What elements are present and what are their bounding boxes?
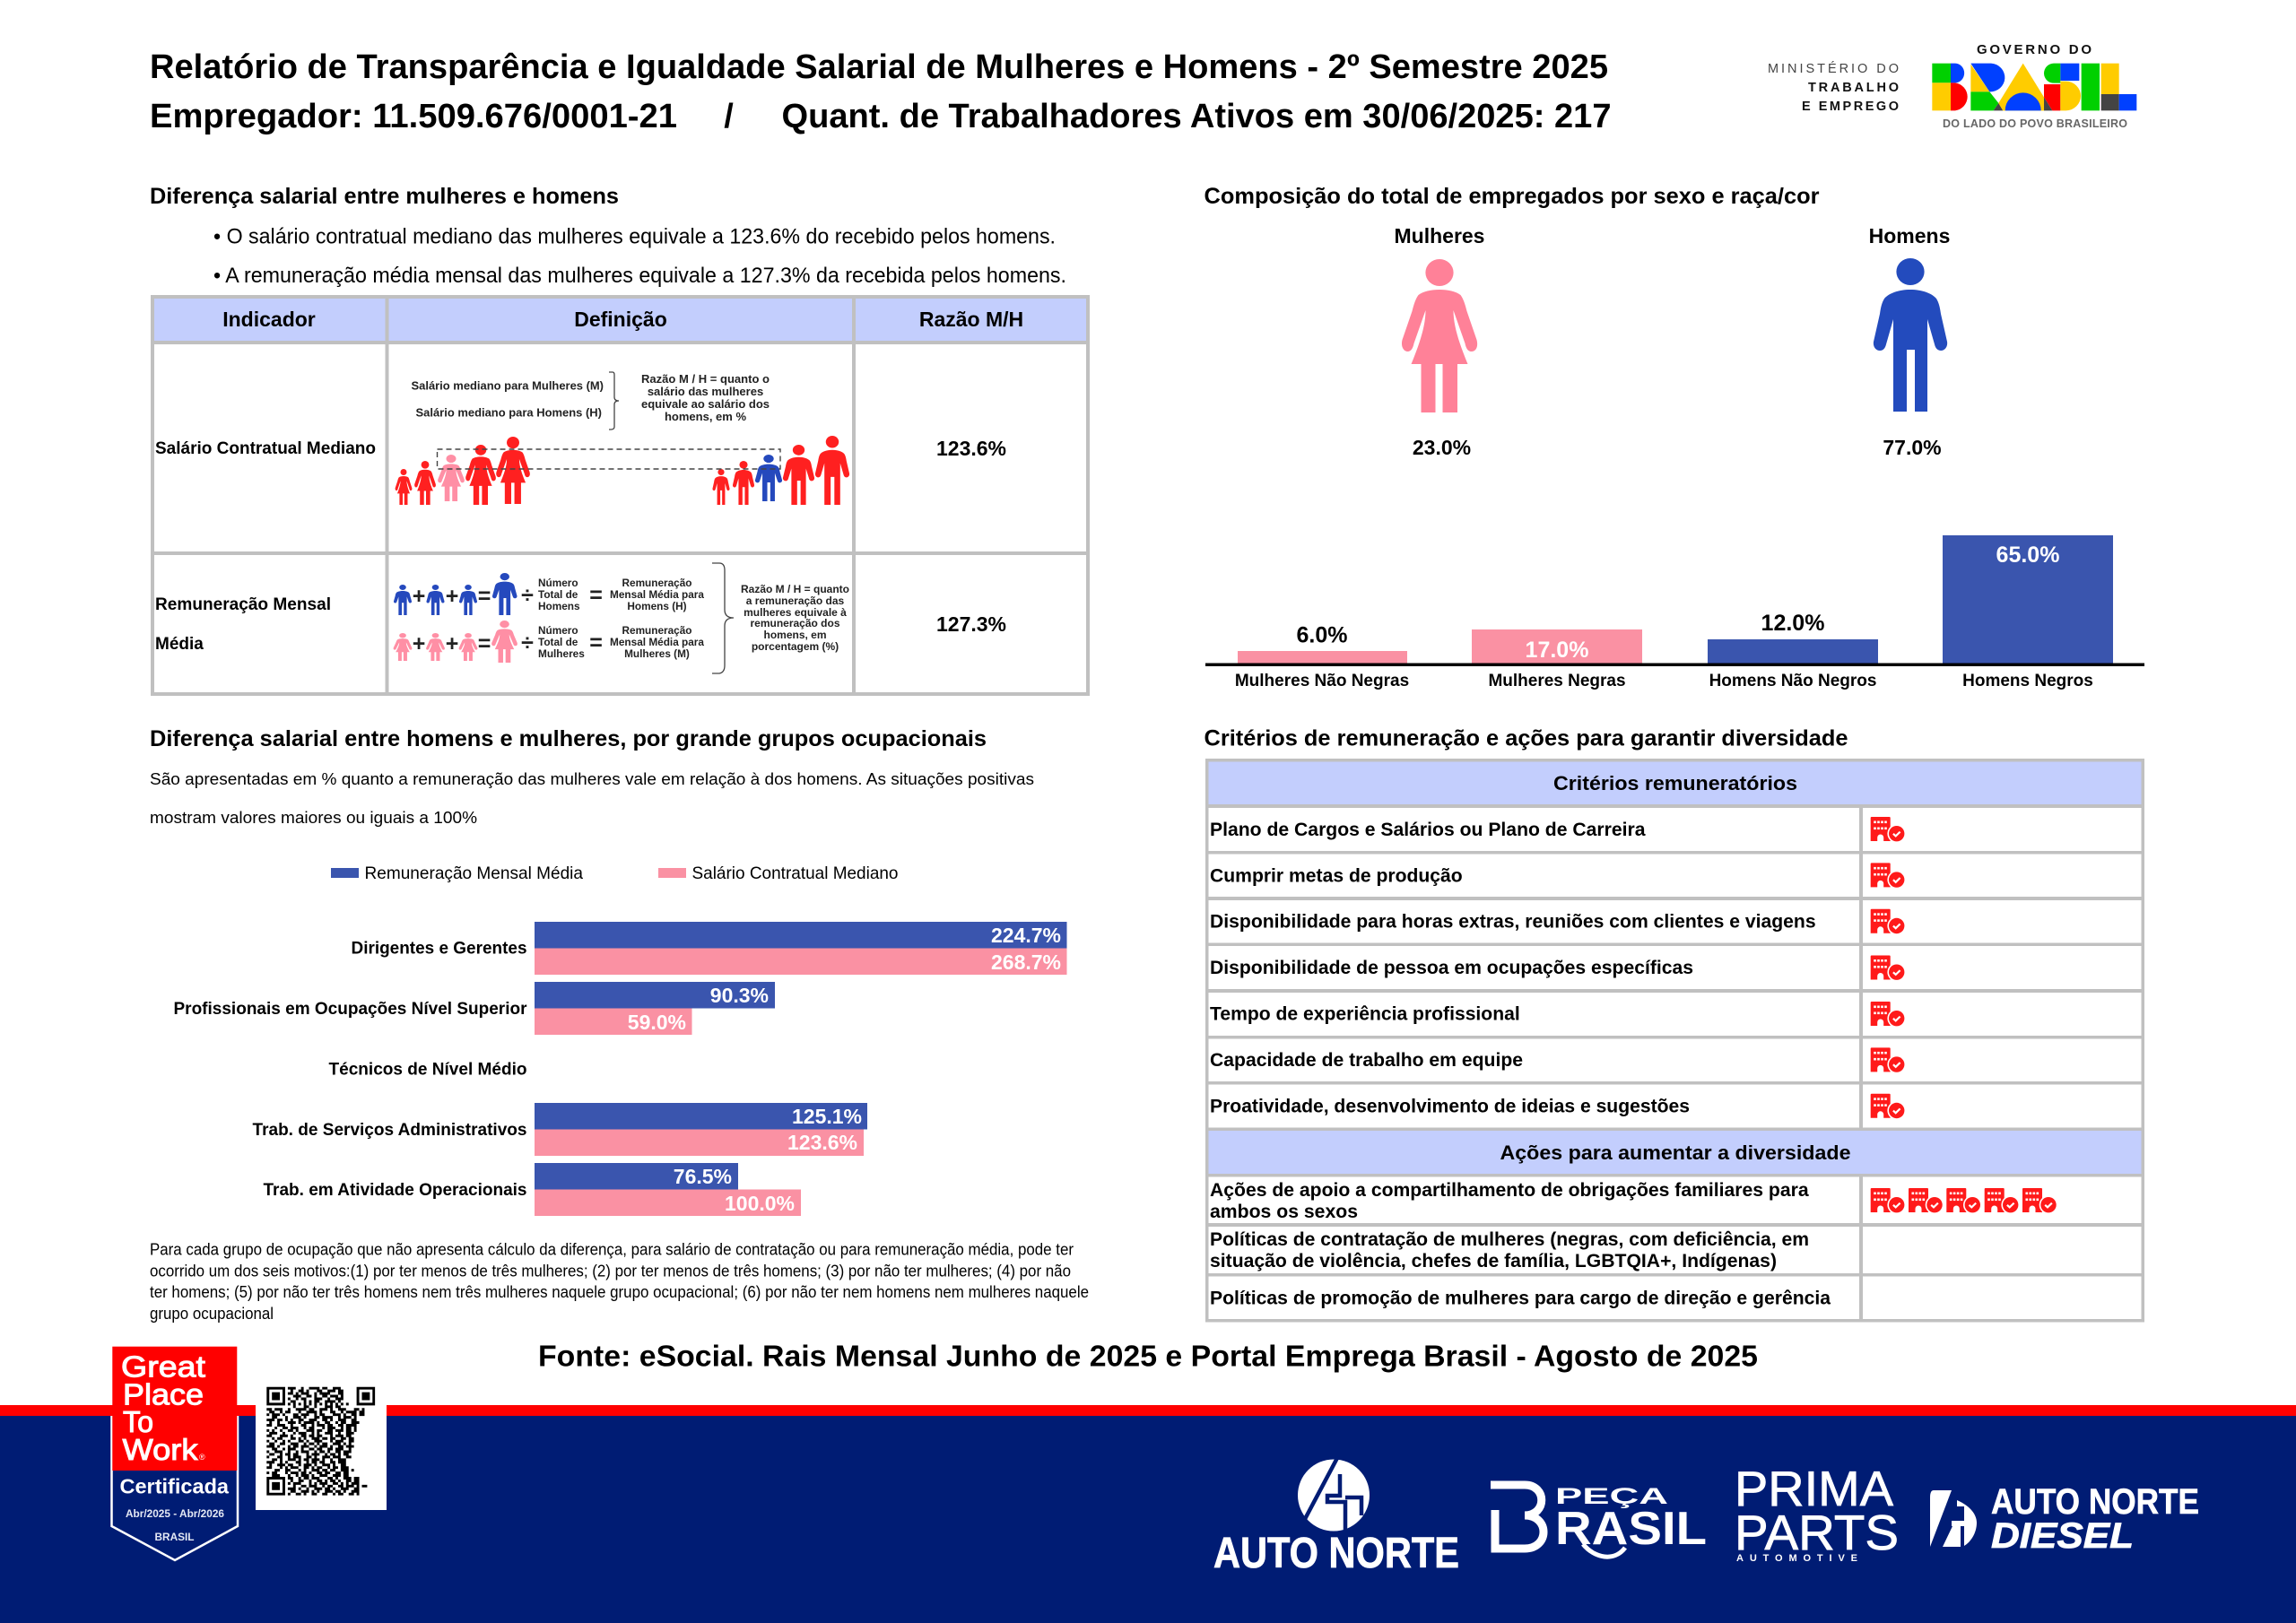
table: critérios e ações <box>1205 759 2144 1322</box>
text block: bullets: • O salário contratual mediano das mulheres equivale a 123.6% do recebido pelos homens. <box>213 224 1056 249</box>
row: ocupações específicas: Disponibilidade de pessoa em ocupações específicas <box>1210 958 1693 978</box>
diagram: salário mediano: Salário mediano para Mulheres (M) <box>411 378 604 393</box>
diagram: remuneração média: homens, em <box>763 629 827 641</box>
group: atividade operacional: 100.0% <box>725 1192 795 1215</box>
diagram: remuneração média: = <box>478 584 491 609</box>
bar: mulheres não negras: 6.0% <box>1297 622 1347 647</box>
footnote: ter homens; (5) por não ter três homens nem três mulheres naquele grupo ocupacional; (6) por não ter nem homens nem mulheres naquele <box>150 1282 1089 1301</box>
bar: homens não negros <box>1708 611 1878 690</box>
table headers <box>222 308 1023 331</box>
logo: Governo do Brasil: DO LADO DO POVO BRASILEIRO <box>1943 117 2127 130</box>
group: profissionais nível superior <box>174 982 775 1035</box>
badge: Great Place To Work: BRASIL <box>154 1532 194 1543</box>
row: ocupações específicas <box>1210 956 1906 981</box>
badge: Great Place To Work: Place <box>123 1377 204 1411</box>
value: razão salário: 123.6% <box>936 437 1006 460</box>
row: proatividade <box>1210 1094 1906 1120</box>
diagram: remuneração média: Mensal Média para <box>610 636 704 648</box>
row: metas de produção <box>1210 863 1906 889</box>
source line: Fonte: eSocial. Rais Mensal Junho de 2025 e Portal Emprega Brasil - Agosto de 2025 <box>538 1340 1758 1374</box>
diagram: remuneração média: Número <box>538 577 578 589</box>
row: experiência: Tempo de experiência profissional <box>1210 1004 1520 1024</box>
heading: composição: Composição do total de empregados por sexo e raça/cor <box>1204 184 1820 209</box>
diagram: remuneração média: Remuneração <box>622 624 692 637</box>
diagram: remuneração média: = <box>478 631 491 656</box>
logo: Governo do Brasil <box>1932 42 2136 130</box>
row: políticas de contratação: Políticas de contratação de mulheres (negras, com deficiência, em <box>1210 1229 1809 1250</box>
diagram: remuneração média: = <box>589 583 603 608</box>
diagram: remuneração média: + <box>413 631 425 656</box>
panel: diferença salarial <box>150 184 1090 696</box>
label: homens: Homens <box>1869 224 1950 247</box>
row: plano de cargos: Plano de Cargos e Salários ou Plano de Carreira <box>1210 820 1646 840</box>
diagram: remuneração média: Mensal Média para <box>610 588 704 601</box>
badge: Great Place To Work: Great <box>121 1350 205 1383</box>
logo: Peça Brasil: RASIL <box>1555 1503 1707 1555</box>
group: atividade operacional: 76.5% <box>674 1165 732 1188</box>
heading: critérios: Critérios de remuneração e ações para garantir diversidade <box>1204 726 1848 751</box>
diagram: remuneração média: = <box>589 630 603 655</box>
footnote <box>150 1239 1089 1323</box>
diagram: remuneração média: + <box>446 631 458 656</box>
label: mulheres: Mulheres <box>1395 224 1484 247</box>
diagram: salário mediano: homens, em % <box>665 410 746 423</box>
logo: Prima Parts: PARTS <box>1735 1505 1899 1560</box>
diagram: remuneração média: Razão M / H = quanto <box>741 583 849 595</box>
title: Quant. de Trabalhadores Ativos em 30/06/2025: 217 <box>782 98 1611 135</box>
diagram: remuneração média: Homens <box>538 600 580 612</box>
diagram: salário mediano: Razão M / H = quanto o <box>641 372 770 386</box>
icon: mulher <box>1402 259 1477 412</box>
diagram: salário mediano <box>396 372 849 505</box>
bar: mulheres não negras: Mulheres Não Negras <box>1235 672 1409 690</box>
bar: homens negros <box>1943 535 2113 690</box>
bar: homens não negros: 12.0% <box>1761 611 1824 636</box>
badge: Great Place To Work: ® <box>199 1453 205 1462</box>
diagram: remuneração média: Mulheres <box>538 647 585 660</box>
text block: explicação: São apresentadas em % quanto a remuneração das mulheres vale em relação à dos homens. As situações positivas <box>150 769 1034 788</box>
logo: Ministério do Trabalho e Emprego <box>1768 61 1899 114</box>
diagram: remuneração média: ÷ <box>521 583 534 608</box>
logo: Prima Parts: PRIMA <box>1735 1461 1893 1516</box>
badge: Great Place To Work: Abr/2025 - Abr/2026 <box>126 1509 224 1520</box>
group: profissionais nível superior: Profissionais em Ocupações Nível Superior <box>174 999 527 1019</box>
logo: Peça Brasil: PEÇA <box>1555 1484 1668 1509</box>
group: dirigentes e gerentes: Dirigentes e Gerentes <box>352 938 527 958</box>
row: políticas de contratação <box>1210 1229 1809 1271</box>
row: experiência <box>1210 1002 1906 1028</box>
row: compartilhamento de obrigações: Ações de apoio a compartilhamento de obrigações familiares para <box>1210 1180 1809 1201</box>
table headers: Indicador <box>222 308 316 331</box>
bar chart: grupos ocupacionais <box>174 922 1067 1216</box>
group: profissionais nível superior: 59.0% <box>628 1011 686 1034</box>
title: Relatório de Transparência e Igualdade Salarial de Mulheres e Homens - 2º Semestre 2025 <box>150 48 1608 86</box>
row label: remuneração mensal média: Remuneração Mensal <box>155 595 331 614</box>
diagram: remuneração média: Mulheres (M) <box>624 647 690 660</box>
group: dirigentes e gerentes: 268.7% <box>991 950 1061 974</box>
text block: bullets <box>213 224 1066 288</box>
diagram: remuneração média: Número <box>538 624 578 637</box>
logo: Governo do Brasil: GOVERNO DO <box>1977 42 2092 57</box>
value: razão remuneração: 127.3% <box>936 612 1006 636</box>
diagram: remuneração média: + <box>446 584 458 609</box>
logo: Auto Norte: AUTO NORTE <box>1213 1530 1459 1577</box>
heading: diferença salarial: Diferença salarial entre mulheres e homens <box>150 184 619 209</box>
table: indicadores <box>151 295 1090 696</box>
group: serviços administrativos: 123.6% <box>787 1131 857 1154</box>
diagram: remuneração média: + <box>413 584 425 609</box>
logo: Prima Parts: AUTOMOTIVE <box>1736 1553 1857 1564</box>
logo: Ministério do Trabalho e Emprego: MINISTÉRIO DO <box>1768 61 1899 76</box>
diagram: remuneração média: Homens (H) <box>627 600 687 612</box>
logo: Auto Norte Diesel: DIESEL <box>1991 1516 2134 1556</box>
title: Empregador: 11.509.676/0001-21 <box>150 98 677 135</box>
logo: Ministério do Trabalho e Emprego: TRABALHO <box>1808 81 1899 95</box>
logo: Ministério do Trabalho e Emprego: E EMPREGO <box>1802 100 1899 114</box>
row label: remuneração mensal média: Média <box>155 635 204 654</box>
diagram: salário mediano: equivale ao salário dos <box>641 397 770 411</box>
logo: Auto Norte <box>1213 1458 1459 1577</box>
value: homens: 77.0% <box>1883 436 1942 459</box>
footer band <box>0 1405 2296 1623</box>
bar: mulheres negras: Mulheres Negras <box>1488 672 1626 690</box>
legend: Remuneração Mensal Média <box>364 864 583 883</box>
row: horas extras: Disponibilidade para horas extras, reuniões com clientes e viagens <box>1210 911 1816 933</box>
footnote: ocorrido um dos seis motivos:(1) por ter menos de três mulheres; (2) por ter menos de três homens; (3) por não ter mulheres; (4) por não <box>150 1261 1071 1280</box>
table headers: Definição <box>574 308 667 331</box>
badge: Great Place To Work: Certificada <box>120 1474 229 1497</box>
row: metas de produção: Cumprir metas de produção <box>1210 866 1463 886</box>
diagram: remuneração média: remuneração dos <box>750 617 840 629</box>
group: dirigentes e gerentes <box>352 922 1067 975</box>
group: profissionais nível superior: 90.3% <box>710 984 769 1007</box>
group: serviços administrativos: Trab. de Serviços Administrativos <box>253 1120 527 1140</box>
logo: Auto Norte Diesel <box>1930 1482 2199 1556</box>
diagram: remuneração média: Total de <box>538 636 578 648</box>
bar: homens negros: 65.0% <box>1996 542 2059 568</box>
row: proatividade: Proatividade, desenvolvimento de ideias e sugestões <box>1210 1096 1690 1117</box>
group: serviços administrativos: 125.1% <box>792 1105 862 1128</box>
value: mulheres: 23.0% <box>1413 436 1471 459</box>
group: dirigentes e gerentes: 224.7% <box>991 924 1061 947</box>
row: equipe: Capacidade de trabalho em equipe <box>1210 1050 1523 1071</box>
text block: explicação: mostram valores maiores ou iguais a 100% <box>150 808 477 827</box>
footnote: Para cada grupo de ocupação que não apresenta cálculo da diferença, para salário de contratação ou para remuneração média, pode ter <box>150 1239 1074 1259</box>
panel: diferença por grupos ocupacionais <box>150 726 1089 1323</box>
logo: Auto Norte Diesel: AUTO NORTE <box>1991 1482 2199 1522</box>
icon: homem <box>1874 258 1947 412</box>
row: horas extras <box>1210 909 1906 935</box>
bar: mulheres negras <box>1472 629 1642 690</box>
diagram: remuneração média: Remuneração <box>622 577 692 589</box>
badge: Great Place To Work: Work <box>122 1433 198 1466</box>
row label: salário contratual mediano: Salário Contratual Mediano <box>155 439 376 458</box>
logo: Peça Brasil <box>1491 1484 1707 1557</box>
header: ações para diversidade: Ações para aumentar a diversidade <box>1500 1141 1851 1164</box>
group: atividade operacional <box>264 1163 801 1216</box>
bar: mulheres negras: 17.0% <box>1526 638 1588 663</box>
title <box>150 48 1611 135</box>
title: / <box>724 98 734 135</box>
diagram: remuneração média <box>394 563 849 673</box>
group: técnicos de nível médio: Técnicos de Nível Médio <box>328 1060 527 1080</box>
row: políticas de promoção: Políticas de promoção de mulheres para cargo de direção e gerência <box>1210 1288 1831 1309</box>
bar: homens negros: Homens Negros <box>1962 672 2093 690</box>
group: atividade operacional: Trab. em Atividade Operacionais <box>264 1180 527 1200</box>
logo: Prima Parts <box>1735 1461 1899 1564</box>
footnote: grupo ocupacional <box>150 1304 274 1323</box>
bar: homens não negros: Homens Não Negros <box>1709 672 1876 690</box>
panel: critérios de remuneração <box>1204 726 2144 1322</box>
text block: bullets: • A remuneração média mensal das mulheres equivale a 127.3% da recebida pelos homens. <box>213 264 1066 288</box>
diagram: remuneração média: mulheres equivale à <box>744 606 847 619</box>
row: políticas de contratação: situação de violência, chefes de família, LGBTQIA+, Indígenas) <box>1210 1251 1777 1271</box>
legend <box>331 864 899 883</box>
row label: remuneração mensal média <box>155 595 331 654</box>
row: plano de cargos <box>1210 817 1906 843</box>
diagram: remuneração média: porcentagem (%) <box>752 640 839 653</box>
diagram: salário mediano: Salário mediano para Homens (H) <box>416 405 602 420</box>
badge: Great Place To Work <box>111 1347 238 1560</box>
text block: explicação <box>150 769 1034 827</box>
diagram: remuneração média: a remuneração das <box>746 595 845 607</box>
row: equipe <box>1210 1047 1906 1073</box>
row: compartilhamento de obrigações <box>1210 1180 2057 1222</box>
bar chart: sexo e raça <box>1205 535 2144 690</box>
legend: Salário Contratual Mediano <box>692 864 899 883</box>
table headers: Razão M/H <box>919 308 1023 331</box>
QR code <box>256 1372 387 1510</box>
group: serviços administrativos <box>253 1103 867 1156</box>
badge: Great Place To Work: To <box>123 1405 153 1438</box>
header: critérios remuneratórios: Critérios remuneratórios <box>1553 772 1797 794</box>
diagram: remuneração média: ÷ <box>521 630 534 655</box>
panel: composição do total de empregados <box>1204 184 2144 690</box>
diagram: salário mediano: salário das mulheres <box>648 385 763 398</box>
axis line <box>1205 664 2144 666</box>
bar: mulheres não negras <box>1235 622 1409 690</box>
heading: grupos ocupacionais: Diferença salarial entre homens e mulheres, por grande grupos ocupacionais <box>150 726 987 751</box>
diagram: remuneração média: Total de <box>538 588 578 601</box>
row: compartilhamento de obrigações: ambos os sexos <box>1210 1202 1358 1222</box>
